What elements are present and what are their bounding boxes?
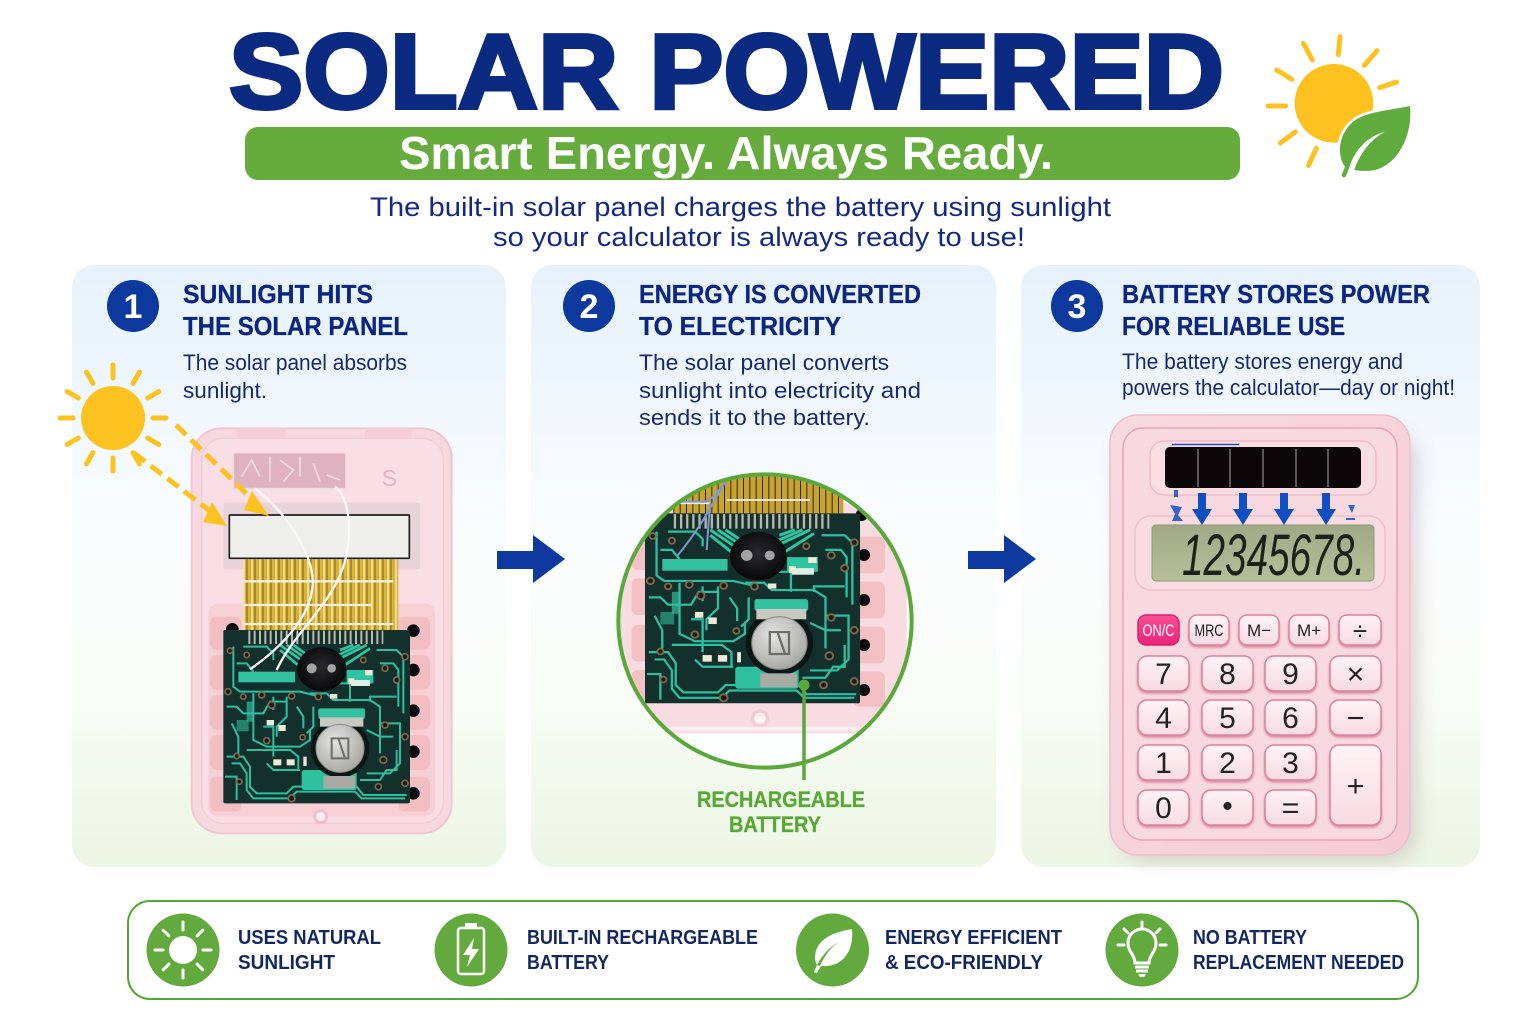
feature: eco-friendly: & ECO-FRIENDLY	[885, 952, 1044, 974]
label: rechargeable battery: BATTERY	[729, 812, 821, 837]
keypad: +	[1347, 770, 1364, 803]
body text: The solar panel converts	[639, 350, 889, 375]
mould ring	[315, 811, 327, 823]
keypad: −	[1347, 702, 1364, 735]
keypad: 1	[1155, 747, 1172, 780]
keypad: MRC	[1194, 621, 1224, 640]
calculator back with circuit board: S	[382, 465, 397, 491]
feature: natural sunlight: SUNLIGHT	[238, 952, 335, 974]
wires	[250, 487, 349, 670]
title: SOLAR POWERED	[229, 13, 1224, 131]
body text: sunlight.	[183, 378, 267, 403]
intro text: The built-in solar panel charges the battery using sunlight	[370, 192, 1112, 222]
step number 2: 2	[580, 288, 598, 326]
keypad: 0	[1155, 792, 1172, 825]
panel: step 2	[531, 265, 996, 867]
keypad: M+	[1297, 621, 1321, 640]
heading: battery stores power	[1122, 279, 1430, 341]
body text: The solar panel absorbs	[183, 350, 407, 375]
step number 3	[1051, 280, 1103, 332]
arrow: step 1 to 2	[497, 535, 565, 583]
keypad: M−	[1247, 621, 1271, 640]
heading: energy is converted: ENERGY IS CONVERTED	[639, 279, 921, 309]
heading: battery stores power: BATTERY STORES POWER	[1122, 279, 1430, 309]
subtitle banner	[245, 127, 1240, 180]
feature: eco-friendly: ENERGY EFFICIENT	[885, 927, 1062, 949]
body text: sends it to the battery.	[639, 405, 870, 430]
feature: rechargeable battery	[434, 914, 758, 986]
panel: step 1	[60, 265, 506, 867]
subtitle banner: Smart Energy. Always Ready.	[399, 127, 1053, 179]
magnified circuit board	[618, 467, 912, 768]
feature: natural sunlight	[146, 914, 381, 986]
keypad: 4	[1155, 702, 1172, 735]
body text	[1122, 349, 1455, 400]
LCD display	[1152, 523, 1374, 588]
keypad: 6	[1282, 702, 1299, 735]
LCD display: 12345678.	[1182, 523, 1365, 588]
intro text: so your calculator is always ready to use!	[493, 222, 1025, 252]
feature: eco-friendly	[796, 914, 1062, 986]
heading: sunlight hits the solar panel: SUNLIGHT HITS	[183, 279, 373, 309]
step number 1	[107, 280, 159, 332]
feature: rechargeable battery: BATTERY	[527, 952, 610, 974]
keypad: ÷	[1353, 616, 1367, 646]
keypad: •	[1222, 790, 1233, 823]
feature: no battery replacement: NO BATTERY	[1193, 927, 1308, 949]
icon: sun with rays	[60, 365, 166, 471]
icon: sun and leaf	[1268, 37, 1410, 177]
keypad: 3	[1282, 747, 1299, 780]
leader line	[798, 680, 810, 780]
feature: rechargeable battery: BUILT-IN RECHARGEABLE	[527, 927, 758, 949]
ribbon cable	[243, 559, 398, 637]
heading: sunlight hits the solar panel	[183, 279, 408, 341]
step number 2	[563, 280, 615, 332]
body text	[639, 350, 921, 430]
keypad: ON/C	[1142, 621, 1174, 640]
dashed sun rays arrows	[134, 425, 269, 526]
heading: sunlight hits the solar panel: THE SOLAR PANEL	[183, 311, 408, 341]
body text: sunlight into electricity and	[639, 378, 921, 403]
keypad: 8	[1219, 658, 1236, 691]
keypad: 5	[1219, 702, 1236, 735]
label: rechargeable battery: RECHARGEABLE	[697, 787, 865, 812]
panel: features strip	[128, 901, 1418, 999]
keypad: =	[1282, 792, 1299, 825]
arrow: step 2 to 3	[968, 535, 1036, 583]
calculator front	[1110, 415, 1418, 862]
keypad: 2	[1219, 747, 1236, 780]
body text	[183, 350, 407, 403]
solar panel	[1165, 444, 1361, 488]
feature: natural sunlight: USES NATURAL	[238, 927, 381, 949]
step number 3: 3	[1068, 288, 1086, 326]
heading: energy is converted	[639, 279, 921, 341]
feature: no battery replacement	[1106, 914, 1404, 986]
keypad	[1138, 615, 1381, 825]
heading: energy is converted: TO ELECTRICITY	[639, 311, 841, 341]
body text: The battery stores energy and	[1122, 349, 1403, 374]
keypad: 7	[1155, 658, 1172, 691]
panel: step 3	[1021, 265, 1480, 867]
energy flow arrows	[1170, 490, 1355, 525]
keypad: ×	[1347, 658, 1364, 691]
intro text	[370, 192, 1112, 252]
keypad: 9	[1282, 658, 1299, 691]
body text: powers the calculator—day or night!	[1122, 375, 1455, 400]
heading: battery stores power: FOR RELIABLE USE	[1122, 311, 1345, 341]
step number 1: 1	[124, 288, 142, 326]
label: rechargeable battery	[697, 787, 865, 837]
feature: no battery replacement: REPLACEMENT NEEDED	[1193, 952, 1404, 974]
calculator back with circuit board	[192, 428, 452, 833]
